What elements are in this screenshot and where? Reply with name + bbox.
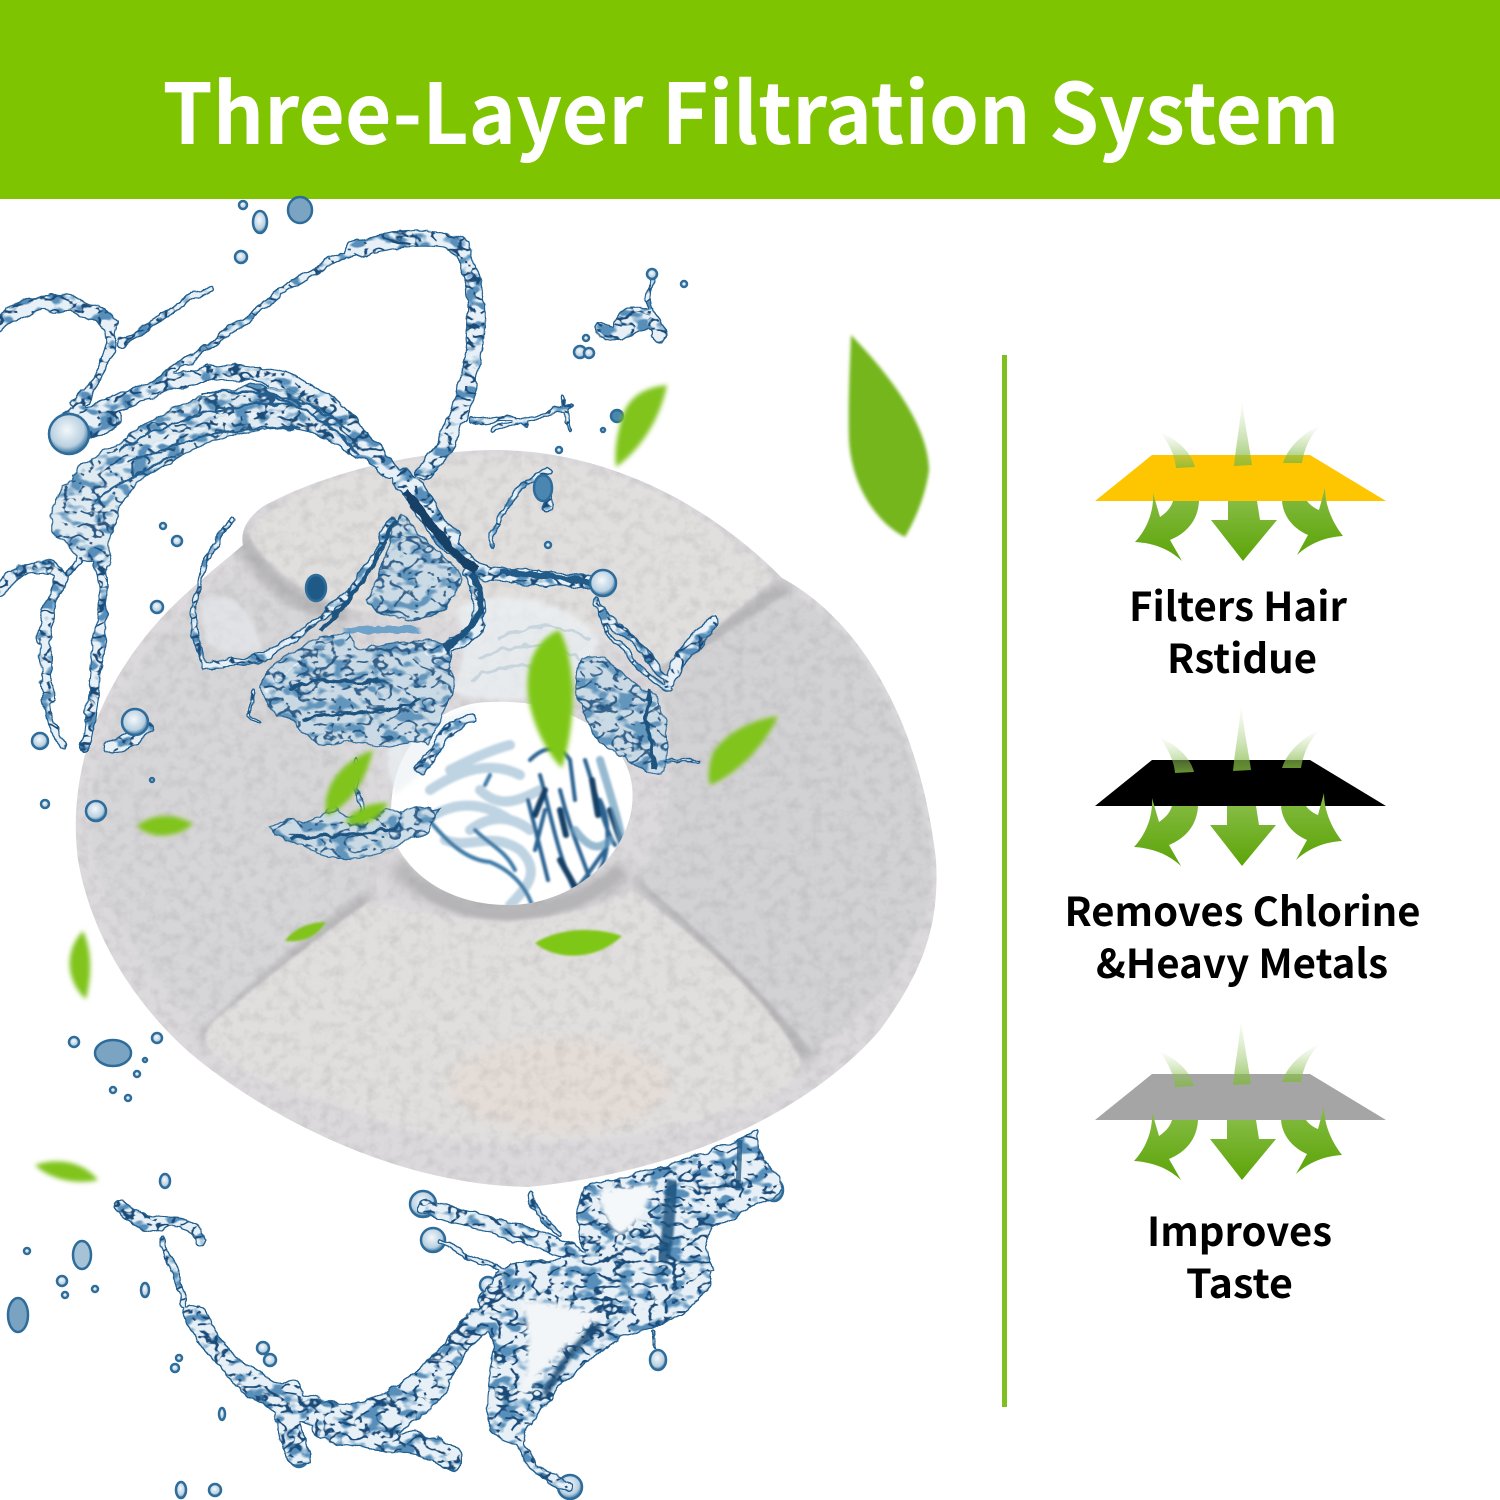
leaf: lower left of centre: [326, 750, 373, 816]
upper waterfall: [577, 1130, 783, 1275]
faded incoming arrows: [1159, 705, 1320, 773]
wave band and left column body: [50, 385, 385, 565]
layer 2 label: [1064, 880, 1420, 990]
left arm: [425, 1208, 585, 1262]
lower splash shading: [515, 1140, 740, 1410]
felt texture: [60, 440, 950, 1200]
layer 3 label: Taste: [1186, 1252, 1293, 1310]
groove shadows: [205, 535, 810, 1060]
filter layer 2 icon: black: [1095, 705, 1386, 866]
water veins and blue highlights: [96, 392, 655, 840]
top wedge: [248, 527, 772, 667]
leaf: lower left: [35, 1161, 98, 1182]
trapezoid layer: [1095, 1074, 1386, 1120]
leaf: left: [137, 816, 193, 836]
title: Three-Layer Filtration System: [162, 48, 1340, 169]
water splash lower: [122, 1130, 783, 1487]
faded incoming arrows: [1160, 400, 1321, 468]
outgoing arrows: [1134, 793, 1342, 866]
bottom wedge: [205, 892, 800, 1068]
centre hole shadow: [420, 870, 620, 915]
leaf: on bottom groove: [285, 922, 326, 941]
medium strands: [40, 250, 712, 825]
leaf: far left: [70, 931, 90, 999]
layer 2 label: &Heavy Metals: [1096, 932, 1388, 990]
water droplets: [8, 197, 783, 1499]
leaf: large top right: [849, 335, 929, 537]
layer 3 label: [1147, 1200, 1332, 1310]
leaf: centre: [527, 630, 573, 768]
water splash upper: [0, 239, 712, 859]
layer 1 label: [1129, 575, 1348, 685]
green leaves: [35, 335, 929, 1182]
filter pad disc: [60, 440, 950, 1200]
vertical divider: [1002, 355, 1007, 1407]
leaf: bottom wedge: [535, 930, 622, 956]
outgoing arrows: [1134, 1107, 1342, 1180]
trapezoid layer: [1095, 760, 1386, 806]
thick strands: [0, 239, 592, 749]
filter layer 3 icon: grey: [1095, 1019, 1386, 1180]
trapezoid layer: [1095, 455, 1386, 501]
leaf: right of centre: [709, 716, 778, 785]
layer 3 label: Improves: [1147, 1200, 1332, 1258]
right wedge: [641, 592, 932, 1050]
leaf: small beside centre: [345, 803, 388, 824]
filter layer 1 icon: yellow: [1095, 400, 1386, 561]
layer 1 label: Rstidue: [1167, 627, 1317, 685]
leaf: upper mid: [615, 385, 667, 467]
water mist under strands: [200, 597, 600, 795]
layer 1 label: Filters Hair: [1129, 575, 1348, 633]
tail to ball: [510, 1430, 568, 1487]
water inside centre hole: [420, 745, 625, 905]
header band with title: [0, 0, 1500, 199]
long curving strand: [122, 1207, 163, 1225]
central knot masses: [262, 515, 666, 859]
left wedge: [310, 618, 342, 624]
faded incoming arrows: [1159, 1019, 1320, 1087]
central falling mass: [477, 1253, 710, 1444]
layer 2 label: Removes Chlorine: [1064, 880, 1420, 938]
outgoing arrows: [1135, 488, 1343, 561]
centre hole: [391, 702, 633, 905]
warm tint: [468, 1055, 652, 1115]
